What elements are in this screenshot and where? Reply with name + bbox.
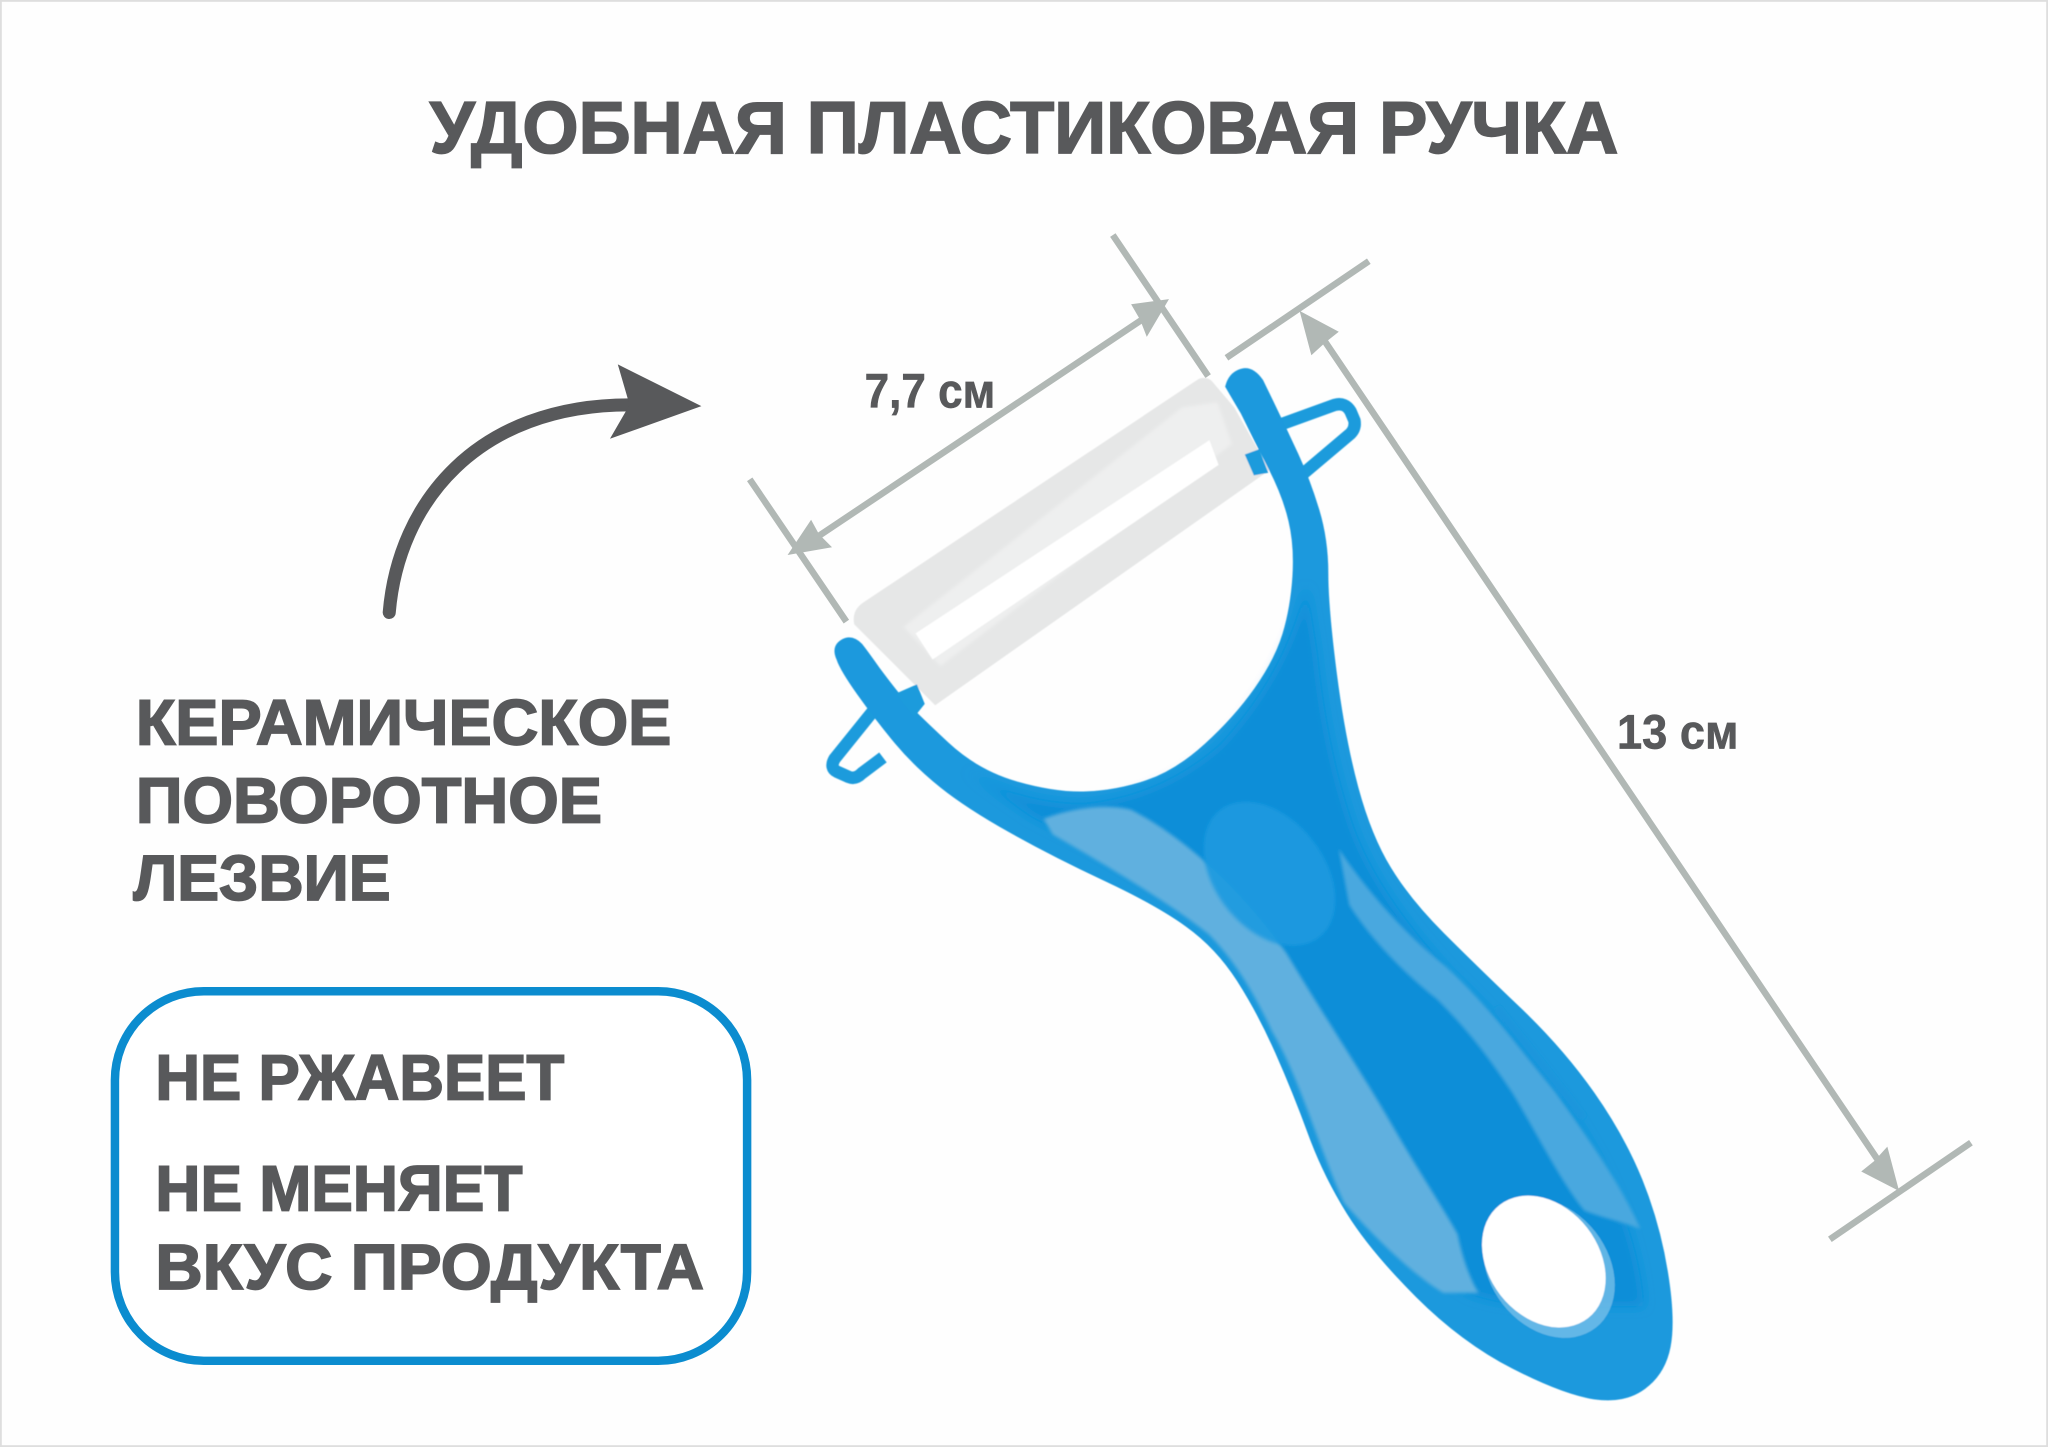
blue tabs [896, 449, 1268, 717]
highlight: left glossy band [1044, 807, 1479, 1293]
dimension: total length 13 cm: 13 см [1617, 705, 1738, 759]
dimension: blade width 7,7 cm: 7,7 см [865, 364, 995, 418]
blade window [916, 440, 1219, 660]
icon: hanging loops [833, 404, 1355, 778]
title: УДОБНАЯ ПЛАСТИКОВАЯ РУЧКА [430, 88, 1618, 169]
dimension: total length 13 cm [1226, 261, 1971, 1239]
text: ceramic rotating blade: ПОВОРОТНОЕ [136, 765, 602, 837]
text: ceramic rotating blade: КЕРАМИЧЕСКОЕ [136, 686, 671, 758]
handle centre shade [967, 588, 1643, 1306]
text: ceramic rotating blade [133, 686, 671, 914]
highlight: darker streak [1497, 1008, 1583, 1118]
finger hole [1456, 1171, 1642, 1364]
text: does not change taste: ВКУС ПРОДУКТА [155, 1231, 704, 1303]
text: does not change taste [155, 1153, 704, 1303]
text: does not rust: НЕ РЖАВЕЕТ [155, 1042, 564, 1114]
oval thumb rest [1176, 776, 1363, 971]
handle body [834, 368, 1673, 1400]
highlight: right glossy band [1339, 849, 1640, 1229]
ceramic blade [854, 378, 1270, 705]
illustration: peeler [833, 368, 1673, 1400]
panel: benefits callout [115, 991, 747, 1361]
dimension: blade width 7,7 cm [750, 235, 1208, 622]
arrow: pointing to the blade [389, 364, 701, 612]
text: ceramic rotating blade: ЛЕЗВИЕ [133, 842, 391, 914]
text: does not change taste: НЕ МЕНЯЕТ [155, 1153, 522, 1225]
